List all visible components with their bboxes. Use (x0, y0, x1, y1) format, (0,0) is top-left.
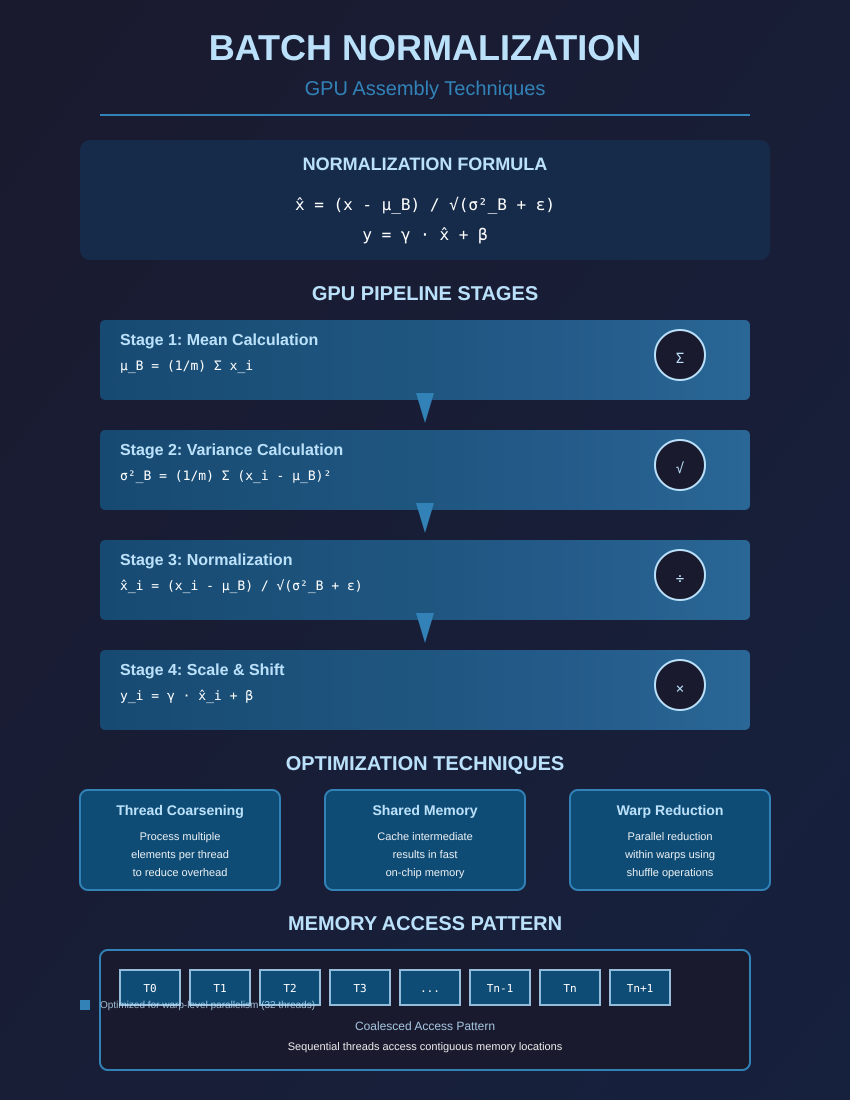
icon: sigma (655, 330, 705, 380)
stage 3 title: Stage 3: Normalization (120, 552, 292, 569)
panel: shared memory (325, 790, 525, 890)
stage 1 formula: μ_B = (1/m) Σ x_i (120, 359, 253, 374)
panel: stage 4 (100, 650, 750, 730)
formula heading: NORMALIZATION FORMULA (303, 154, 547, 174)
memory cell Tn+1 (610, 970, 670, 1005)
title: BATCH NORMALIZATION (209, 27, 641, 68)
stage 2 formula: σ²_B = (1/m) Σ (x_i - μ_B)² (120, 469, 331, 484)
subtitle: GPU Assembly Techniques (305, 78, 545, 100)
heading: GPU pipeline stages: GPU PIPELINE STAGES (312, 283, 538, 305)
shared memory description: results in fast (393, 849, 457, 861)
arrow: stage 2 to 3 (416, 503, 434, 533)
memory cell T2: T2 (283, 982, 297, 995)
heading: memory access pattern: MEMORY ACCESS PATTERN (288, 913, 562, 935)
memory cell ellipsis: ... (420, 982, 440, 995)
arrow: stage 3 to 4 (416, 613, 434, 643)
memory cell T0 (120, 970, 180, 1005)
memory cell Tn (540, 970, 600, 1005)
thread coarsening description: elements per thread (131, 849, 229, 861)
stage 3 formula: x̂_i = (x_i - μ_B) / √(σ²_B + ε) (120, 579, 363, 594)
memory cell T3: T3 (353, 982, 367, 995)
panel: stage 2 (100, 430, 750, 510)
panel: stage 1 (100, 320, 750, 400)
panel: memory access pattern (100, 950, 750, 1070)
memory cell Tn-1: Tn-1 (487, 982, 513, 995)
panel: thread coarsening (80, 790, 280, 890)
warp reduction description: shuffle operations (627, 867, 714, 879)
stage 1 title: Stage 1: Mean Calculation (120, 332, 318, 349)
arrow: stage 1 to 2 (416, 393, 434, 423)
formula line 1: x̂ = (x - μ_B) / √(σ²_B + ε) (295, 195, 555, 214)
icon: square root (655, 440, 705, 490)
icon: multiply (655, 660, 705, 710)
icon: sigma: Σ (676, 351, 684, 367)
thread coarsening title: Thread Coarsening (116, 802, 244, 818)
memory cell Tn: Tn (563, 982, 577, 995)
pattern label: Coalesced Access Pattern (355, 1019, 495, 1033)
icon: square root: √ (676, 461, 685, 477)
memory cell Tn-1 (470, 970, 530, 1005)
panel: normalization formula (80, 140, 770, 260)
icon: multiply: × (676, 681, 684, 697)
thread coarsening description: to reduce overhead (133, 867, 227, 879)
stage 2 title: Stage 2: Variance Calculation (120, 442, 343, 459)
thread coarsening description: Process multiple (140, 831, 220, 843)
shared memory description: Cache intermediate (377, 831, 473, 843)
memory cell Tn+1: Tn+1 (627, 982, 653, 995)
icon: divide: ÷ (676, 571, 684, 587)
shared memory title: Shared Memory (372, 802, 478, 818)
legend: Optimized for warp-level parallelism (32 threads) (100, 1000, 315, 1011)
memory cell T2 (260, 970, 320, 1005)
panel: stage 3 (100, 540, 750, 620)
icon: divide (655, 550, 705, 600)
formula line 2: y = γ · x̂ + β (362, 225, 488, 244)
warp reduction title: Warp Reduction (617, 802, 723, 818)
pattern description: Sequential threads access contiguous memory locations (288, 1041, 563, 1053)
panel: warp reduction (570, 790, 770, 890)
memory cell T3 (330, 970, 390, 1005)
memory cell T1: T1 (213, 982, 227, 995)
warp reduction description: within warps using (624, 849, 715, 861)
memory cell T1 (190, 970, 250, 1005)
shared memory description: on-chip memory (386, 867, 465, 879)
memory cell ellipsis (400, 970, 460, 1005)
stage 4 formula: y_i = γ · x̂_i + β (120, 689, 253, 704)
stage 4 title: Stage 4: Scale & Shift (120, 662, 285, 679)
heading: optimization techniques: OPTIMIZATION TECHNIQUES (286, 753, 564, 775)
memory cell T0: T0 (143, 982, 157, 995)
warp reduction description: Parallel reduction (628, 831, 712, 843)
